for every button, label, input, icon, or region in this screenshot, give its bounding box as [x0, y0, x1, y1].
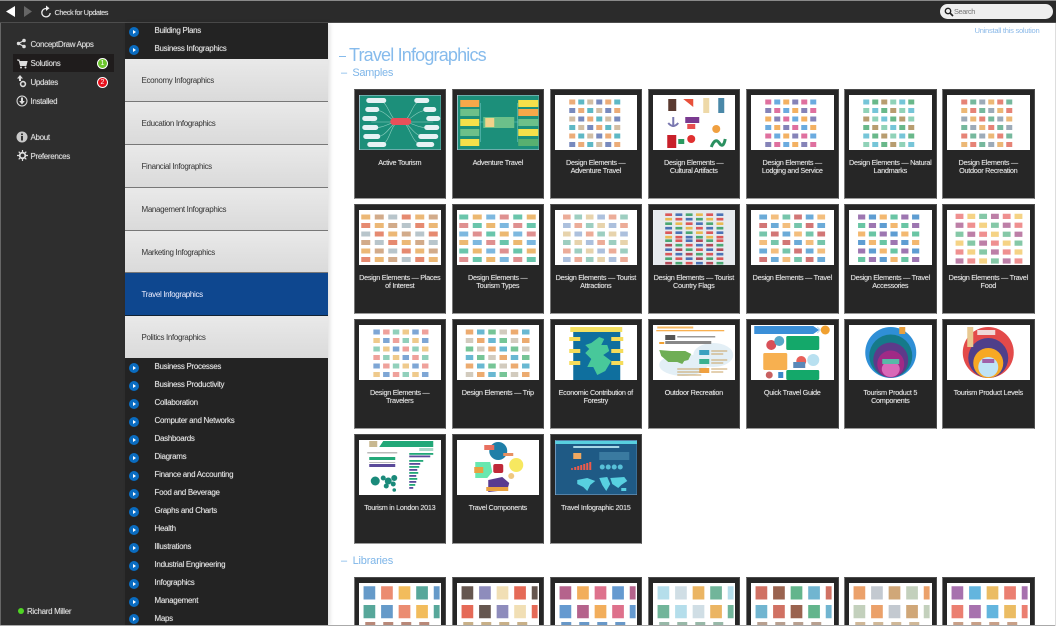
window right edge: [1055, 23, 1056, 626]
tree: Dashboards: Dashboards: [154, 434, 195, 443]
tree: Diagrams: [129, 452, 187, 463]
caption: [654, 272, 734, 290]
icon: back arrow: [6, 6, 15, 17]
card: Tourism Product Levels: [942, 319, 1034, 429]
card: Active Tourism: [354, 89, 446, 199]
thumbnail: icon grid: [849, 210, 932, 265]
caption: [550, 388, 641, 404]
caption: Design Elements — Travel: [753, 272, 832, 282]
caption: Cultural Artifacts: [670, 166, 718, 174]
card: Design Elements — Cultural Artifacts: [648, 89, 740, 199]
submenu: Financial Infographics: Financial Infographics: [142, 162, 212, 171]
thumbnail: icon grid: [554, 210, 637, 265]
caption: [958, 158, 1018, 174]
thumbnail: flags grid: [652, 210, 735, 265]
thumbnail: icon grid: [652, 95, 735, 150]
tree: Finance and Accounting: [129, 470, 234, 481]
tree: Infographics: Infographics: [154, 578, 194, 587]
caption: Travel Infographic 2015: [561, 502, 630, 512]
thumbnail: mind map: [358, 95, 441, 150]
caption: Attractions: [580, 280, 611, 290]
caption: Travel Components: [469, 502, 527, 512]
submenu: Education Infographics: Education Infographics: [142, 119, 215, 128]
library card 5: [746, 577, 838, 625]
icon: cart: [17, 60, 28, 68]
thumbnail: icon grid: [456, 210, 539, 265]
icon: refresh: [41, 6, 51, 18]
tree: Maps: [129, 614, 174, 624]
card: Tourism Product 5 Components: [844, 319, 936, 429]
library card 4: [648, 577, 740, 625]
tree: Building Plans: [129, 26, 202, 37]
card: Design Elements — Travel: [746, 204, 838, 314]
caption: [948, 272, 1028, 290]
search placeholder: Search: [954, 7, 975, 16]
caption: Adventure Travel: [473, 158, 523, 166]
tree: Dashboards: [129, 434, 195, 445]
thumbnail: dark blue infographic: [554, 440, 637, 495]
icon: apps: [16, 38, 26, 48]
thumbnail: icon grid: [947, 210, 1030, 265]
submenu: Management Infographics: Management Infographics: [142, 205, 226, 214]
caption: Design Elements —: [370, 388, 429, 396]
thumbnail: people grid: [358, 325, 441, 380]
card: Design Elements — Outdoor Recreation: [942, 89, 1034, 199]
tree: Health: [129, 524, 176, 535]
submenu: Education Infographics: [125, 102, 328, 145]
submenu: Economy Infographics: Economy Infographics: [142, 76, 214, 85]
thumbnail: outdoor recreation icons: [751, 583, 834, 625]
toolbar label: Check for Updates: [54, 8, 108, 16]
card: Design Elements — Trip: [452, 319, 544, 429]
badge: updates count: [97, 76, 108, 88]
caption: Components: [871, 396, 909, 404]
caption: [762, 158, 823, 175]
caption: [566, 158, 626, 174]
submenu: Marketing Infographics: Marketing Infographics: [142, 248, 215, 257]
caption: Design Elements — Travel: [851, 272, 930, 282]
section heading: samples: – Samples: [341, 67, 393, 79]
tree: Management: Management: [154, 596, 198, 605]
caption: Active Tourism: [378, 158, 421, 166]
tree: Illustrations: Illustrations: [154, 542, 191, 551]
caption: [849, 158, 932, 174]
tree: Business Infographics: [129, 44, 227, 55]
icon: forward arrow: [24, 6, 32, 17]
tree: Management: [129, 596, 198, 607]
thumbnail: icon grid: [751, 210, 834, 265]
card: Outdoor Recreation: [648, 319, 740, 429]
tree: Building Plans: Building Plans: [154, 26, 201, 35]
icon: preferences gear: [17, 150, 28, 161]
left sidebar: [0, 23, 125, 626]
tree: Business Processes: Business Processes: [154, 362, 221, 371]
icon: magnifier: [944, 8, 954, 17]
thumbnail: outdoor poster: [652, 325, 735, 380]
tree: Business Productivity: Business Productivity: [154, 380, 224, 389]
caption: [664, 158, 724, 174]
caption: Design Elements —: [959, 158, 1018, 166]
user name: Richard Miller: [27, 607, 71, 616]
tree: Food and Beverage: Food and Beverage: [154, 488, 220, 497]
library card 6: [844, 577, 936, 625]
thumbnail: component map: [456, 440, 539, 495]
icon: about: [16, 132, 28, 142]
thumbnail: landmarks grid: [358, 210, 441, 265]
card: Design Elements — Tourism Types: [452, 204, 544, 314]
thumbnail: icon grid: [947, 95, 1030, 150]
tree: Collaboration: [129, 398, 198, 409]
caption: [845, 388, 936, 404]
tree: Food and Beverage: [129, 488, 220, 499]
badge: solutions count: [97, 58, 108, 68]
caption: Landmarks: [874, 166, 907, 174]
tree: Finance and Accounting: Finance and Accounting: [154, 470, 233, 479]
thumbnail: lodging icons: [554, 583, 637, 625]
card: Design Elements — Tourist Country Flags: [648, 204, 740, 314]
tree: Business Processes: [129, 362, 222, 373]
card: Design Elements — Tourist Attractions: [550, 204, 642, 314]
tree: Business Infographics: Business Infographics: [154, 44, 226, 53]
menu: About: About: [30, 133, 50, 142]
icon: installed: [16, 96, 28, 106]
submenu: Politics Infographics: Politics Infographics: [142, 333, 206, 342]
thumbnail: Scotland map poster: [554, 325, 637, 380]
tree: Industrial Engineering: Industrial Engineering: [154, 560, 225, 569]
thumbnail: guide poster: [751, 325, 834, 380]
caption: of Interest: [385, 280, 414, 290]
menu: Updates: Updates: [30, 78, 58, 87]
card: Design Elements — Lodging and Service: [746, 89, 838, 199]
thumbnail: nested circles: [849, 325, 932, 380]
caption: Design Elements — Trip: [462, 388, 534, 396]
caption: [359, 272, 441, 290]
thumbnail: icon grid: [456, 325, 539, 380]
menu: ConceptDraw Apps: ConceptDraw Apps: [30, 40, 94, 49]
page title: Travel Infographics: [349, 45, 486, 65]
icon: updates: [17, 75, 26, 88]
library card 3: [550, 577, 642, 625]
menu: Preferences: Preferences: [30, 152, 70, 161]
menu: Solutions: Solutions: [30, 59, 60, 68]
card: Economic Contribution of Forestry: [550, 319, 642, 429]
top toolbar: [0, 0, 1056, 23]
tree: Graphs and Charts: [129, 506, 218, 517]
card: Travel Components: [452, 434, 544, 544]
tree: Health: Health: [154, 524, 176, 533]
thumbnail: adventure icons: [358, 583, 441, 625]
card: Design Elements — Adventure Travel: [550, 89, 642, 199]
card: Design Elements — Travel Food: [942, 204, 1034, 314]
thumbnail: icon grid: [554, 95, 637, 150]
caption: Travelers: [386, 396, 413, 404]
library card 2: [452, 577, 544, 625]
tree: Graphs and Charts: Graphs and Charts: [154, 506, 217, 515]
submenu: Travel Infographics selected: Travel Infographics: [142, 290, 203, 299]
library card 7: [942, 577, 1034, 625]
caption: Country Flags: [673, 280, 715, 290]
tree: Maps: Maps: [154, 614, 173, 623]
badge: updates count: 2: [101, 78, 104, 86]
caption: Design Elements —: [468, 272, 527, 282]
caption: Design Elements —: [664, 158, 723, 166]
tree: Business Productivity: [129, 380, 225, 391]
tree: Infographics: [129, 578, 195, 589]
search box: [940, 4, 1053, 19]
card: Quick Travel Guide: [746, 319, 838, 429]
thumbnail: places of interest icons: [849, 583, 932, 625]
thumbnail: London infographic: [358, 440, 441, 495]
thumbnail: tree diagram: [456, 95, 539, 150]
caption: Design Elements —: [566, 158, 625, 166]
submenu: Economy Infographics: [125, 59, 328, 102]
caption: Forestry: [584, 396, 608, 404]
caption: Design Elements — Natural: [849, 158, 932, 166]
caption: Adventure Travel: [571, 166, 621, 174]
caption: Lodging and Service: [762, 166, 823, 174]
thumbnail: icon grid: [751, 95, 834, 150]
section heading: libraries: – Libraries: [341, 555, 393, 567]
badge: solutions count: 1: [101, 60, 104, 66]
caption: Tourism Types: [476, 280, 519, 290]
caption: Quick Travel Guide: [764, 388, 821, 396]
caption: Tourism Product 5: [863, 388, 917, 396]
thumbnail: icon grid: [849, 95, 932, 150]
uninstall link: Uninstall this solution: [974, 26, 1039, 35]
menu: Installed: Installed: [30, 97, 57, 106]
thumbnail: natural landmark icons: [652, 583, 735, 625]
card: Adventure Travel: [452, 89, 544, 199]
card: Tourism in London 2013: [354, 434, 446, 544]
caption: Tourism Product Levels: [954, 388, 1023, 396]
submenu: Financial Infographics: [125, 145, 328, 188]
caption: [468, 272, 528, 290]
caption: Design Elements —: [763, 158, 822, 166]
card: Travel Infographic 2015: [550, 434, 642, 544]
caption: Design Elements — Tourist: [556, 272, 636, 282]
tree: Computer and Networks: Computer and Networks: [154, 416, 234, 425]
selected item highlight: [13, 54, 114, 72]
caption: Tourism in London 2013: [364, 502, 435, 512]
caption: Design Elements — Places: [359, 272, 440, 282]
submenu: Travel Infographics selected: [125, 273, 328, 316]
caption: Food: [981, 280, 996, 290]
caption: [556, 272, 636, 290]
submenu: Politics Infographics: [125, 316, 328, 358]
tree: Illustrations: [129, 542, 192, 553]
caption: [370, 388, 430, 404]
card: Design Elements — Travelers: [354, 319, 446, 429]
window bottom edge: [0, 625, 1056, 626]
card: Design Elements — Travel Accessories: [844, 204, 936, 314]
caption: Outdoor Recreation: [959, 166, 1017, 174]
status dot: [18, 608, 24, 614]
caption: Design Elements — Tourist: [654, 272, 734, 282]
thumbnail: artifact icons: [456, 583, 539, 625]
submenu: Management Infographics: [125, 188, 328, 231]
caption: Accessories: [872, 280, 908, 290]
thumbnail: tourism type icons: [947, 583, 1030, 625]
submenu: Marketing Infographics: [125, 231, 328, 273]
caption: Outdoor Recreation: [665, 388, 723, 396]
caption: Design Elements — Travel: [949, 272, 1028, 282]
library card 1: [354, 577, 446, 625]
tree: Collaboration: Collaboration: [154, 398, 198, 407]
card: Design Elements — Natural Landmarks: [844, 89, 936, 199]
thumbnail: nested circles: [947, 325, 1030, 380]
caption: Economic Contribution of: [559, 388, 633, 396]
tree: Computer and Networks: [129, 416, 235, 427]
tree: Diagrams: Diagrams: [154, 452, 186, 461]
solutions tree column: [125, 23, 328, 626]
tree: Industrial Engineering: [129, 560, 226, 571]
card: Design Elements — Places of Interest: [354, 204, 446, 314]
caption: [850, 272, 930, 290]
